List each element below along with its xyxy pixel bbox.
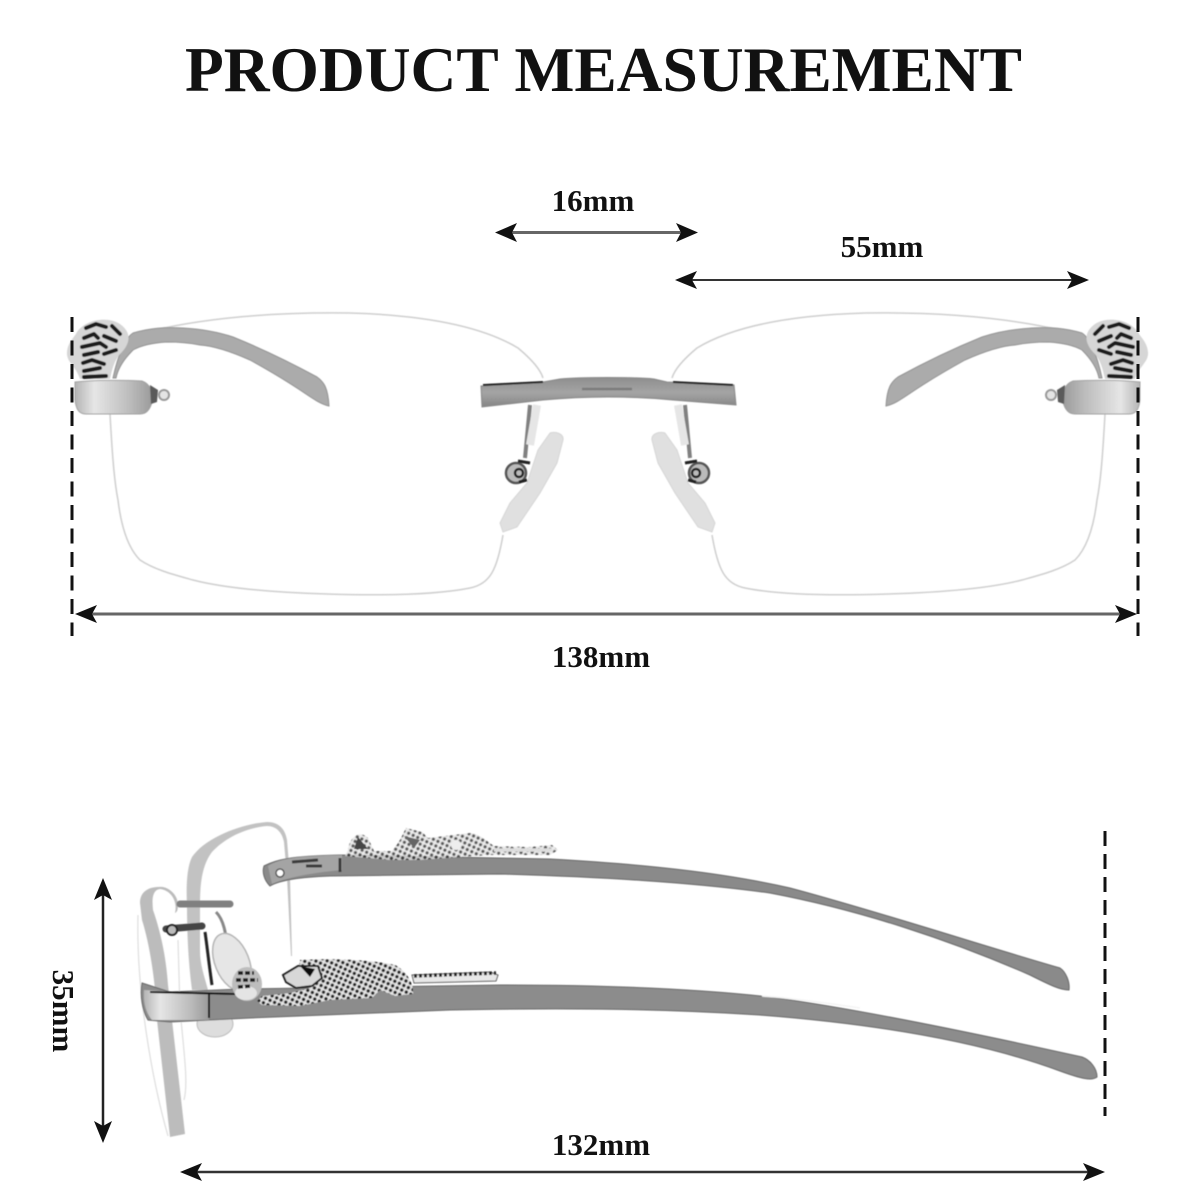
left leopard head ornament bbox=[67, 320, 129, 379]
near temple highlight bbox=[762, 996, 860, 1008]
right hinge block bbox=[1062, 380, 1140, 414]
dashed guide: temple end bbox=[1104, 831, 1106, 1116]
bridge width arrow bbox=[495, 223, 698, 242]
left nose arm bbox=[525, 405, 530, 458]
title: PRODUCT MEASUREMENT bbox=[185, 34, 1022, 105]
right lens inner edge bbox=[678, 405, 685, 445]
dashed guide: left edge bbox=[70, 317, 74, 636]
temple length arrow bbox=[180, 1163, 1105, 1181]
near lens strip bbox=[140, 887, 185, 1137]
left pad screw bbox=[506, 461, 530, 483]
right hinge screw bbox=[1046, 385, 1065, 404]
lens height label: 35mm bbox=[46, 970, 81, 1052]
left nose pad bbox=[500, 432, 563, 532]
bridge bar bbox=[481, 378, 736, 407]
lens height arrow bbox=[94, 878, 112, 1143]
left hinge screw bbox=[150, 385, 169, 404]
frame width label: 138mm bbox=[552, 639, 650, 674]
bridge width label: 16mm bbox=[552, 183, 634, 218]
right nose arm bbox=[685, 405, 690, 458]
front view glasses bbox=[67, 313, 1148, 595]
lens width arrow bbox=[675, 271, 1089, 289]
right leopard head ornament bbox=[1086, 320, 1148, 379]
lens width label: 55mm bbox=[841, 229, 923, 264]
right nose pad bbox=[652, 432, 715, 532]
far temple hinge holes bbox=[268, 855, 342, 884]
far leopard ornament bbox=[345, 828, 558, 860]
rear nose bridge hardware bbox=[180, 904, 230, 945]
hinge line bbox=[150, 992, 235, 1018]
right half of front view bbox=[652, 313, 1148, 595]
near leopard ornament bbox=[257, 959, 498, 1006]
left half of front view bbox=[67, 313, 563, 595]
side view glasses bbox=[138, 822, 1097, 1137]
leopard hinge ball bbox=[232, 967, 262, 1001]
nose pad bbox=[205, 928, 259, 996]
left lens inner edge bbox=[530, 405, 537, 445]
near hinge highlight bbox=[144, 990, 209, 1020]
temple length label: 132mm bbox=[552, 1127, 650, 1162]
near temple arm bbox=[141, 983, 1097, 1079]
dashed guide: right edge bbox=[1136, 317, 1140, 636]
far temple arm bbox=[263, 855, 1069, 990]
lower nose pad bbox=[197, 1011, 233, 1037]
near lens thin edge bbox=[138, 915, 186, 1136]
far lens strip bbox=[187, 822, 292, 990]
front nose hardware bbox=[166, 925, 212, 985]
left lens outline bbox=[110, 313, 543, 595]
frame width arrow bbox=[75, 605, 1137, 623]
right pad screw bbox=[685, 461, 709, 483]
right temple arm bbox=[886, 328, 1102, 406]
left temple arm bbox=[113, 328, 329, 406]
right lens outline bbox=[672, 313, 1105, 595]
left hinge block bbox=[75, 380, 153, 414]
